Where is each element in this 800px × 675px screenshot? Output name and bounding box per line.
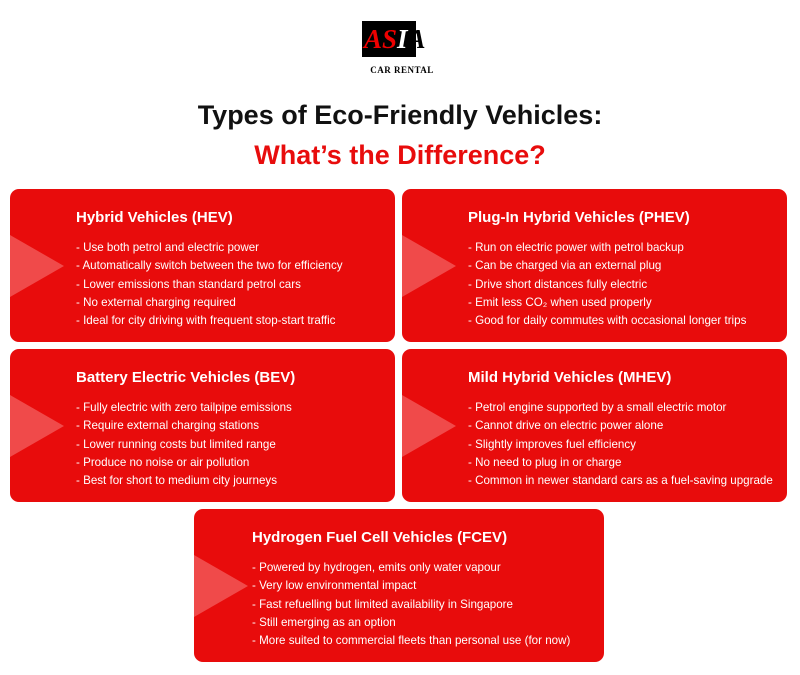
list PHEV: - Run on electric power with petrol backup [468, 241, 684, 254]
panel: HEV [10, 189, 395, 342]
icon: triangle [402, 395, 456, 457]
heading PHEV: Plug-In Hybrid Vehicles (PHEV) [468, 209, 690, 226]
heading MHEV: Mild Hybrid Vehicles (MHEV) [468, 369, 671, 386]
icon: triangle [402, 235, 456, 297]
logo text: ASIA [364, 24, 426, 54]
list BEV: - Require external charging stations [76, 419, 259, 432]
list FCEV: - Still emerging as an option [252, 616, 396, 629]
heading HEV: Hybrid Vehicles (HEV) [76, 209, 233, 226]
list HEV: - Use both petrol and electric power [76, 241, 259, 254]
list PHEV [468, 241, 746, 327]
panel: BEV [10, 349, 395, 502]
list HEV: - No external charging required [76, 296, 236, 309]
title [198, 100, 602, 170]
list HEV [76, 241, 343, 327]
list MHEV: - Slightly improves fuel efficiency [468, 438, 636, 451]
panel: MHEV [402, 349, 787, 502]
list HEV: - Lower emissions than standard petrol cars [76, 278, 301, 291]
logo [362, 21, 434, 75]
heading FCEV: Hydrogen Fuel Cell Vehicles (FCEV) [252, 529, 507, 546]
logo box [362, 21, 416, 57]
list BEV: - Fully electric with zero tailpipe emissions [76, 401, 292, 414]
title: Types of Eco-Friendly Vehicles: [198, 100, 602, 130]
list MHEV: - Common in newer standard cars as a fuel-saving upgrade [468, 474, 773, 487]
list HEV: - Ideal for city driving with frequent stop-start traffic [76, 314, 335, 327]
list PHEV: - Good for daily commutes with occasional longer trips [468, 314, 746, 327]
logo subtitle: CAR RENTAL [370, 65, 434, 75]
panel: FCEV [194, 509, 604, 662]
list MHEV [468, 401, 773, 487]
list FCEV: - Very low environmental impact [252, 579, 416, 592]
list PHEV: - Drive short distances fully electric [468, 278, 647, 291]
title: What’s the Difference? [254, 140, 546, 170]
list FCEV [252, 561, 570, 647]
list PHEV: - Emit less CO₂ when used properly [468, 296, 652, 309]
list HEV: - Automatically switch between the two for efficiency [76, 259, 343, 272]
list MHEV: - Petrol engine supported by a small electric motor [468, 401, 726, 414]
heading BEV: Battery Electric Vehicles (BEV) [76, 369, 295, 386]
icon: triangle [10, 395, 64, 457]
icon: triangle [194, 555, 248, 617]
panel: PHEV [402, 189, 787, 342]
list FCEV: - Powered by hydrogen, emits only water vapour [252, 561, 501, 574]
list MHEV: - Cannot drive on electric power alone [468, 419, 663, 432]
icon: triangle [10, 235, 64, 297]
list BEV [76, 401, 292, 487]
list PHEV: - Can be charged via an external plug [468, 259, 661, 272]
list BEV: - Lower running costs but limited range [76, 438, 276, 451]
list FCEV: - Fast refuelling but limited availability in Singapore [252, 598, 513, 611]
list BEV: - Best for short to medium city journeys [76, 474, 277, 487]
list FCEV: - More suited to commercial fleets than personal use (for now) [252, 634, 570, 647]
list MHEV: - No need to plug in or charge [468, 456, 621, 469]
list BEV: - Produce no noise or air pollution [76, 456, 249, 469]
